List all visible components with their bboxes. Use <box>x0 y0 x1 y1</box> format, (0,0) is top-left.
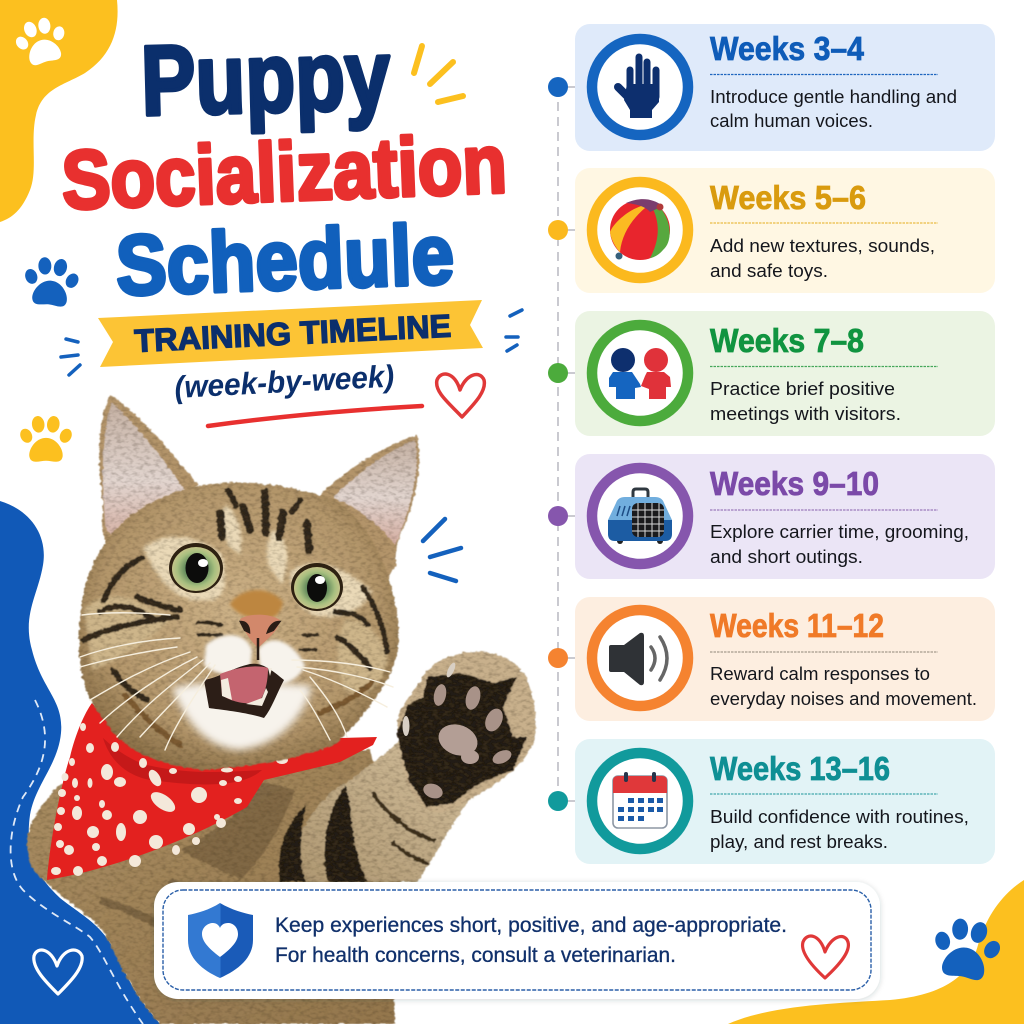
divider <box>710 74 938 76</box>
ribbon: training timeline: TRAINING TIMELINE <box>134 308 452 359</box>
orange nose bridge <box>230 590 283 618</box>
heading: Weeks 9–10 <box>710 465 879 502</box>
heart: red note <box>803 936 848 978</box>
description <box>710 522 969 567</box>
title: Socialization <box>60 117 508 227</box>
description: Reward calm responses to <box>710 664 930 684</box>
card: weeks 5-6 <box>548 168 995 293</box>
ribbon: training timeline <box>98 300 483 367</box>
description: Add new textures, sounds, <box>710 236 935 256</box>
cat body, arm and paw fur <box>27 652 536 1024</box>
divider <box>710 222 938 224</box>
dashed line on blob <box>11 700 143 1024</box>
blob: yellow bottom-right <box>728 880 1024 1024</box>
description <box>710 807 969 852</box>
icon: people <box>609 348 671 399</box>
red underline <box>208 406 422 426</box>
heart: red top <box>437 374 484 417</box>
description: play, and rest breaks. <box>710 832 888 852</box>
icon: carrier <box>608 489 672 544</box>
title: Schedule <box>114 207 455 314</box>
subtitle: (week-by-week) <box>174 359 395 405</box>
head stripes <box>83 490 387 700</box>
description: Practice brief positive <box>710 379 895 399</box>
cat ear left <box>99 395 198 570</box>
icon: shield with heart <box>188 903 253 978</box>
timeline dot <box>548 506 568 526</box>
paw: blue bottom-right <box>927 913 1007 984</box>
timeline <box>558 87 590 801</box>
cat head <box>79 482 399 770</box>
callout: safety note <box>154 882 880 999</box>
description: meetings with visitors. <box>710 404 901 424</box>
icon: speaker <box>609 633 667 685</box>
paw: white on yellow blob <box>9 12 73 69</box>
cat ear right <box>318 435 419 590</box>
description: and safe toys. <box>710 261 828 281</box>
description: calm human voices. <box>710 111 873 131</box>
description: and short outings. <box>710 547 863 567</box>
description: everyday noises and movement. <box>710 689 977 709</box>
divider <box>710 651 938 653</box>
cream markings <box>143 505 372 617</box>
heading: Weeks 11–12 <box>710 607 884 644</box>
blob: blue left <box>0 501 160 1024</box>
cat photo illustration <box>27 395 536 1024</box>
sparkles: blue by ribbon <box>61 310 522 375</box>
card: weeks 7-8 <box>548 311 995 436</box>
card: weeks 13-16 <box>548 739 995 864</box>
white muzzle and chin <box>172 635 312 750</box>
timeline dot <box>548 648 568 668</box>
title <box>60 19 508 314</box>
note text: Keep experiences short, positive, and age-appropriate. <box>275 914 787 937</box>
cat whiskers <box>80 613 393 750</box>
paw: blue left <box>20 254 83 308</box>
paw: yellow left <box>18 415 74 462</box>
cat paw beans <box>402 661 514 801</box>
description <box>710 236 935 281</box>
timeline dot <box>548 791 568 811</box>
icon ring <box>592 610 688 706</box>
cat bandana <box>47 703 377 880</box>
heading: Weeks 13–16 <box>710 750 890 787</box>
description <box>710 664 977 709</box>
divider <box>710 793 938 795</box>
divider <box>710 509 938 511</box>
timeline dot <box>548 220 568 240</box>
cat nose <box>240 615 280 660</box>
icon ring <box>592 753 688 849</box>
note text: For health concerns, consult a veterinarian. <box>275 944 676 967</box>
description <box>710 379 901 424</box>
description: Explore carrier time, grooming, <box>710 522 969 542</box>
description: Introduce gentle handling and <box>710 87 957 107</box>
card: weeks 3-4 <box>548 24 995 151</box>
blob: yellow top-left <box>0 0 118 222</box>
title: Puppy <box>140 19 391 136</box>
icon ring <box>592 182 688 278</box>
sparkles: blue by cat <box>423 519 461 581</box>
icon: ball <box>610 199 670 260</box>
icon ring <box>592 325 688 421</box>
icon: hand <box>618 57 659 118</box>
heart: white on blob <box>34 950 82 994</box>
description <box>710 87 957 131</box>
heading: Weeks 3–4 <box>710 30 865 67</box>
icon ring <box>592 39 688 135</box>
timeline dot <box>548 77 568 97</box>
description: Build confidence with routines, <box>710 807 969 827</box>
heading: Weeks 5–6 <box>710 179 866 216</box>
card: weeks 9-10 <box>548 454 995 579</box>
cat mouth <box>204 664 284 718</box>
heading: Weeks 7–8 <box>710 322 864 359</box>
sparkles: yellow by title <box>414 46 463 102</box>
icon: calendar <box>613 772 667 828</box>
note text <box>275 914 787 967</box>
cat eye right <box>291 563 343 611</box>
card: weeks 11-12 <box>548 597 995 721</box>
timeline dot <box>548 363 568 383</box>
cat eye left <box>169 543 223 593</box>
icon ring <box>592 468 688 564</box>
divider <box>710 366 938 368</box>
